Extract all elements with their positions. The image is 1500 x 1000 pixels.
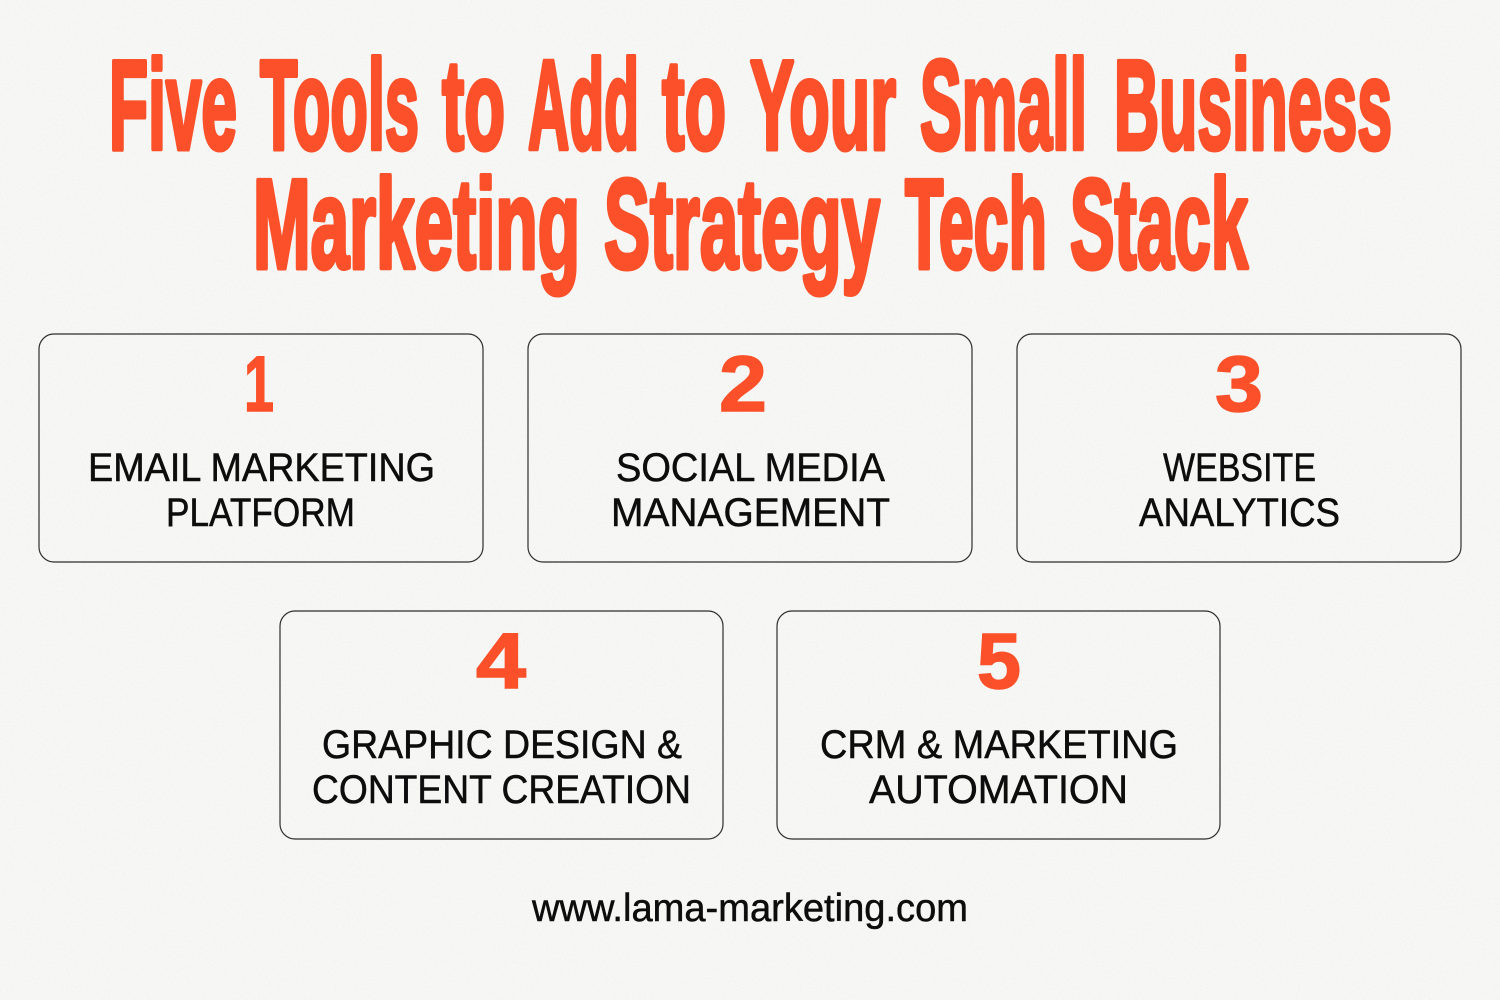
label: email marketing platform bbox=[88, 446, 435, 535]
panel: tool 5 bbox=[777, 611, 1220, 839]
label: social media management: MANAGEMENT bbox=[611, 491, 890, 535]
title: Stack bbox=[1070, 153, 1248, 295]
label: website analytics: WEBSITE bbox=[1163, 446, 1316, 490]
website url: www.lama-marketing.com bbox=[531, 887, 968, 930]
panel: tool 3 bbox=[1017, 334, 1461, 562]
label: graphic design and content creation: CONTENT CREATION bbox=[312, 768, 691, 812]
panel: tool 4 bbox=[280, 611, 723, 839]
number 1: 1 bbox=[244, 339, 274, 428]
number 2: 2 bbox=[719, 339, 767, 428]
label: social media management: SOCIAL MEDIA bbox=[616, 446, 885, 490]
number 5: 5 bbox=[977, 616, 1021, 705]
label: crm and marketing automation bbox=[820, 723, 1178, 812]
number 3: 3 bbox=[1215, 339, 1263, 428]
panel: tool 2 bbox=[528, 334, 972, 562]
label: email marketing platform: EMAIL MARKETING bbox=[88, 446, 435, 490]
panel: tool 1 bbox=[39, 334, 483, 562]
title: to bbox=[442, 34, 505, 176]
label: website analytics: ANALYTICS bbox=[1139, 491, 1340, 535]
title: Strategy bbox=[604, 153, 880, 295]
label: social media management bbox=[611, 446, 890, 535]
title: Tech bbox=[905, 153, 1047, 295]
title: Tools bbox=[260, 34, 419, 176]
title: Marketing bbox=[253, 153, 580, 295]
title bbox=[109, 34, 1392, 295]
number 4: 4 bbox=[476, 616, 526, 705]
title: Small bbox=[920, 34, 1087, 176]
title: to bbox=[662, 34, 726, 176]
label: crm and marketing automation: CRM & MARKETING bbox=[820, 723, 1178, 767]
label: graphic design and content creation: GRAPHIC DESIGN & bbox=[322, 723, 682, 767]
label: crm and marketing automation: AUTOMATION bbox=[869, 768, 1128, 812]
label: graphic design and content creation bbox=[312, 723, 691, 812]
title: Five bbox=[109, 34, 237, 176]
title: Your bbox=[750, 34, 896, 176]
label: website analytics bbox=[1139, 446, 1340, 535]
title: Add bbox=[528, 34, 639, 176]
label: email marketing platform: PLATFORM bbox=[166, 491, 355, 535]
